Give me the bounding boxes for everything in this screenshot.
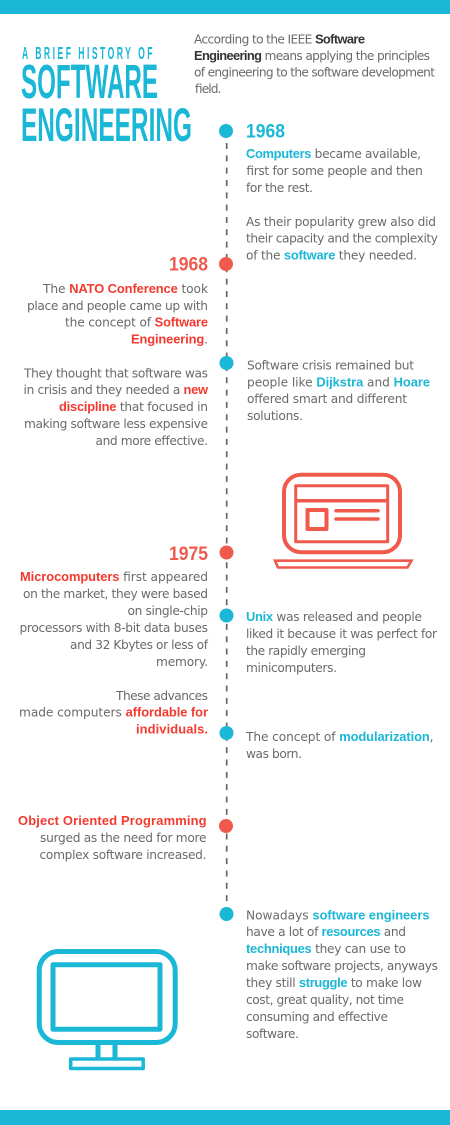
entry: 1975 microcomputers: and 32 Kbytes or less of: [70, 638, 209, 652]
title: A BRIEF HISTORY OF: [22, 43, 155, 63]
entry: software crisis: Software crisis remained but: [247, 358, 414, 372]
entry: 1968 computers: Computers became available,: [246, 146, 421, 161]
entry: 1975 microcomputers: 1975: [169, 544, 208, 565]
entry: unix: minicomputers.: [246, 661, 337, 675]
entry: 1968 computers: of the software they needed.: [246, 248, 417, 262]
entry: 1968 NATO conference: the concept of Software: [65, 314, 208, 330]
top bar: [0, 0, 450, 14]
entry: nowadays: software.: [246, 1027, 299, 1041]
title: [21, 43, 192, 151]
entry: nowadays: cost, great quality, not time: [246, 993, 404, 1007]
entry: 1975 microcomputers: on single-chip: [128, 604, 208, 618]
entry: nowadays: they still struggle to make low: [246, 975, 422, 990]
entry: 1975 microcomputers: made computers affordable for: [19, 704, 208, 720]
entry: 1968 computers: for the rest.: [246, 181, 313, 195]
entry: 1968 computers: first for some people and then: [246, 164, 423, 178]
entry: 1975 microcomputers: Microcomputers first appeared: [20, 569, 208, 584]
entry: nowadays: have a lot of resources and: [246, 924, 406, 939]
entry: software crisis: offered smart and different: [247, 392, 407, 406]
timeline dots: [219, 124, 234, 921]
entry: 1975 microcomputers: individuals.: [136, 722, 208, 736]
entry: nowadays: [246, 908, 438, 1041]
entry: 1968 computers: their capacity and the complexity: [246, 232, 438, 246]
entry: 1968 NATO conference: The NATO Conference took: [42, 281, 209, 296]
icon: desktop monitor: [39, 952, 175, 1068]
icon: laptop: [275, 475, 412, 568]
entry: modularization: [245, 729, 434, 761]
entry: 1968 computers: As their popularity grew also did: [246, 215, 436, 229]
entry: 1975 microcomputers: processors with 8-bit data buses: [20, 621, 208, 635]
entry: object oriented programming: complex software increased.: [40, 848, 206, 862]
entry: 1975 microcomputers: [19, 544, 209, 736]
bottom bar: [0, 1110, 450, 1125]
entry: nowadays: Nowadays software engineers: [246, 908, 430, 922]
entry: 1968 NATO conference: Engineering.: [131, 332, 208, 346]
entry: 1968 NATO conference: in crisis and they needed a new: [24, 382, 209, 397]
entry: 1975 microcomputers: These advances: [115, 689, 208, 703]
entry: 1968 NATO conference: making software less expensive: [24, 417, 208, 431]
entry: unix: the rapidly emerging: [246, 644, 366, 658]
entry: object oriented programming: surged as the need for more: [40, 831, 206, 845]
entry: 1968 NATO conference: place and people came up with: [27, 299, 208, 313]
entry: nowadays: make software projects, anyways: [246, 959, 438, 973]
intro text: [194, 32, 435, 96]
entry: 1975 microcomputers: memory.: [156, 655, 208, 669]
entry: nowadays: consuming and effective: [246, 1010, 388, 1024]
entry: software crisis: [247, 358, 430, 423]
entry: software crisis: people like Dijkstra and Hoare: [247, 374, 430, 390]
entry: object oriented programming: [18, 813, 207, 862]
entry: 1968 NATO conference: discipline that focused in: [59, 399, 208, 414]
entry: 1968 NATO conference: 1968: [169, 254, 208, 276]
entry: modularization: was born.: [246, 747, 302, 761]
entry: unix: Unix was released and people: [246, 609, 422, 624]
title: ENGINEERING: [21, 98, 192, 151]
entry: unix: liked it because it was perfect for: [246, 627, 438, 641]
intro text: field.: [195, 82, 221, 96]
entry: unix: [246, 609, 438, 675]
intro text: Engineering means applying the principles: [194, 48, 430, 63]
entry: nowadays: techniques they can use to: [246, 941, 406, 956]
entry: modularization: The concept of modularization,: [245, 729, 434, 744]
timeline dashed line: [226, 143, 228, 908]
intro text: of engineering to the software development: [194, 66, 435, 80]
entry: object oriented programming: Object Oriented Programming: [18, 813, 207, 828]
entry: 1968 NATO conference: [23, 254, 209, 448]
entry: 1968 NATO conference: and more effective.: [96, 434, 208, 448]
intro text: According to the IEEE Software: [194, 32, 365, 46]
entry: 1968 NATO conference: They thought that software was: [23, 366, 208, 380]
title: SOFTWARE: [21, 56, 158, 109]
entry: software crisis: solutions.: [247, 409, 303, 423]
entry: 1968 computers: [246, 122, 438, 262]
entry: 1975 microcomputers: on the market, they were based: [23, 587, 208, 601]
entry: 1968 computers: 1968: [246, 122, 285, 142]
